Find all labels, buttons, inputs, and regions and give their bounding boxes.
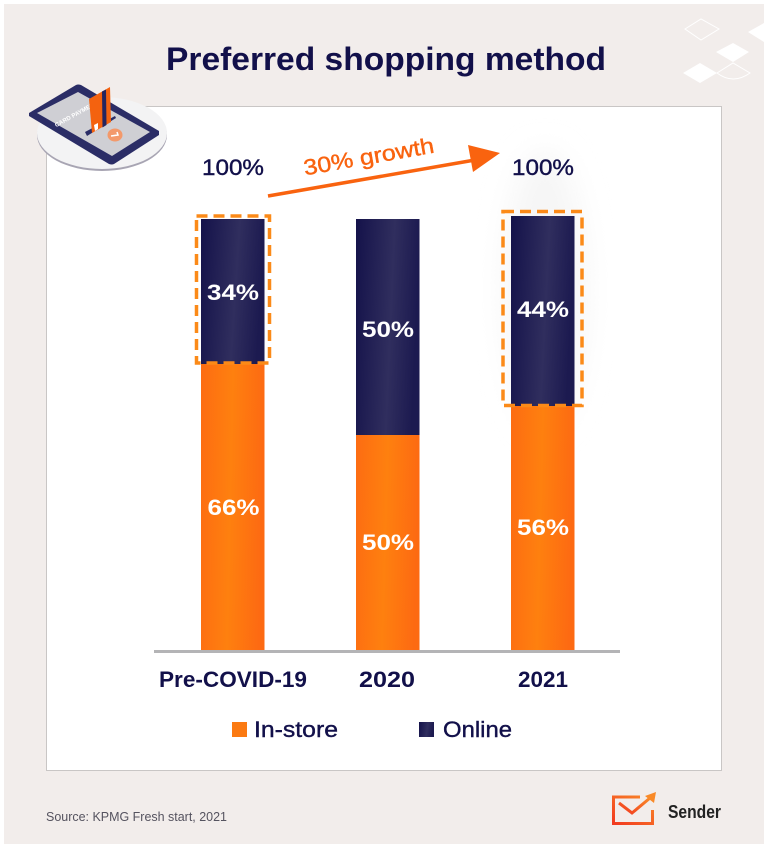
total label: Pre-COVID-19: 100% <box>202 155 264 180</box>
title: Preferred shopping method <box>166 41 606 77</box>
bar: Pre-COVID-19: 34% <box>207 280 259 305</box>
source: Source: KPMG Fresh start, 2021 <box>46 810 227 824</box>
growth label: 30% growth <box>302 133 436 180</box>
total label: 2021: 100% <box>512 155 574 180</box>
logo: Sender: Sender <box>668 802 721 822</box>
legend: In-store: In-store <box>254 717 338 742</box>
axis label: Pre-COVID-19: Pre-COVID-19 <box>159 667 307 692</box>
axis label: 2021: 2021 <box>518 667 568 692</box>
logo: Sender <box>614 792 721 824</box>
bar: Pre-COVID-19: 66% <box>208 495 260 520</box>
decorative diamonds <box>683 19 764 83</box>
bar: 2020: 50% <box>362 530 414 555</box>
bar: Pre-COVID-19 <box>201 219 264 651</box>
growth arrow <box>268 145 500 196</box>
dashed highlight: 2021 online <box>503 212 582 406</box>
dashed highlight: Pre-COVID-19 online <box>196 216 270 363</box>
chart baseline <box>154 650 620 653</box>
legend: Online <box>419 717 512 742</box>
chart panel <box>46 106 722 770</box>
axis label: 2020: 2020 <box>359 667 415 692</box>
bar: 2021: 44% <box>517 297 569 322</box>
smudge behind 2021 bar <box>503 150 587 430</box>
bar: 2020: 50% <box>362 317 414 342</box>
icon: phone with payment card: CARD PAYMENT <box>54 101 99 129</box>
bar: 2020 <box>356 219 420 651</box>
bar: 2021 <box>511 216 574 651</box>
bar: 2021: 56% <box>517 515 569 540</box>
icon: phone with payment card <box>29 84 167 171</box>
legend: Online: Online <box>443 717 512 742</box>
